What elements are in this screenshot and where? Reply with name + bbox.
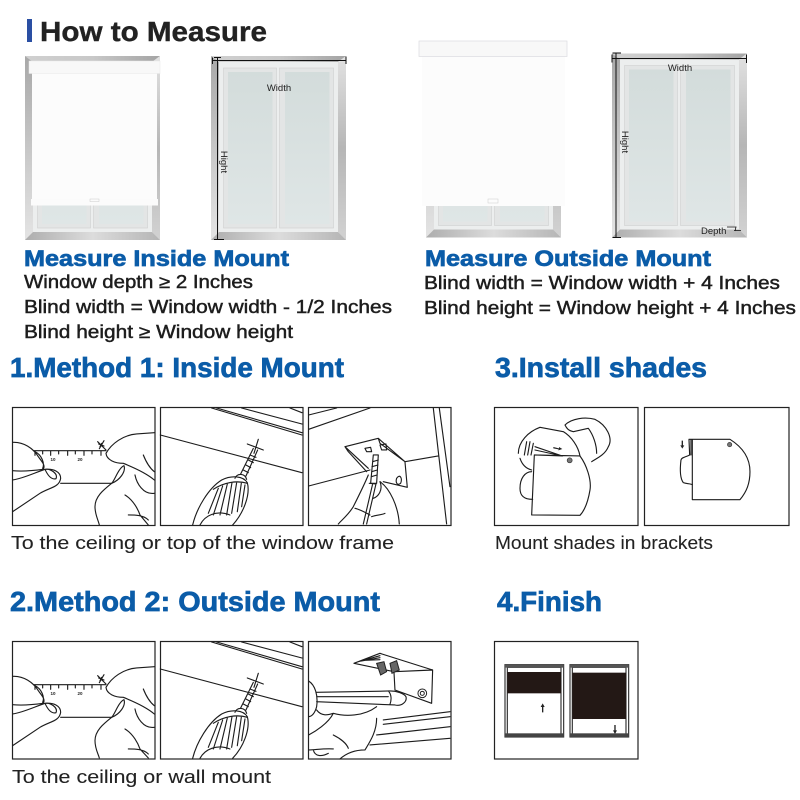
height label: Hight bbox=[218, 151, 229, 173]
panel: measure with ruler, method 2: 10 bbox=[50, 691, 56, 696]
panel: measure with ruler, method 1 bbox=[12, 408, 155, 526]
depth label: Depth bbox=[701, 226, 726, 237]
panel: measure with ruler, method 1: 10 bbox=[50, 457, 56, 462]
heading: measure outside mount: Measure Outside Mount bbox=[425, 246, 712, 271]
title accent bar bbox=[27, 19, 32, 42]
illustration: inside mount window with width and height marks bbox=[211, 56, 346, 240]
heading: install shades: 3.Install shades bbox=[495, 352, 707, 383]
panel: screw bracket to wall, method 2 bbox=[308, 642, 451, 759]
height measure line bbox=[612, 53, 621, 238]
caption: install shades: Mount shades in brackets bbox=[495, 533, 713, 553]
heading: finish: 4.Finish bbox=[497, 586, 602, 617]
heading: measure inside mount: Measure Inside Mount bbox=[24, 246, 290, 271]
width label: Width bbox=[267, 83, 291, 94]
inside mount rules: Window depth ≥ 2 Inches bbox=[24, 272, 253, 292]
inside mount rules bbox=[24, 272, 392, 342]
outside mount rules: Blind height = Window height + 4 Inches bbox=[424, 298, 796, 318]
depth mark bbox=[727, 227, 741, 231]
panel: measure with ruler, method 2 bbox=[12, 642, 155, 759]
panel: measure with ruler, method 2: 20 bbox=[77, 691, 83, 696]
width measure line bbox=[212, 56, 346, 64]
illustration: inside mount blind on window bbox=[25, 56, 160, 240]
width label: Width bbox=[668, 63, 692, 74]
illustration: outside mount window with width, height, depth marks bbox=[612, 53, 747, 238]
caption: method 2: To the ceiling or wall mount bbox=[12, 767, 271, 787]
illustration: outside mount blind on window bbox=[419, 41, 567, 238]
caption: method 1: To the ceiling or top of the window frame bbox=[11, 533, 394, 553]
left window, shade raised bbox=[505, 665, 564, 737]
panel: drill hole, method 2 bbox=[160, 642, 303, 759]
panel: finish, blinds up and down bbox=[494, 642, 638, 759]
panel: shade seated in bracket bbox=[644, 408, 789, 526]
inside mount rules: Blind width = Window width - 1/2 Inches bbox=[24, 297, 392, 317]
panel: insert shade in bracket bbox=[494, 408, 638, 526]
panel: drill hole, method 1 bbox=[160, 408, 303, 526]
height label: Hight bbox=[619, 131, 630, 153]
inside mount rules: Blind height ≥ Window height bbox=[24, 322, 293, 342]
heading: method 2: 2.Method 2: Outside Mount bbox=[10, 586, 380, 617]
width measure line bbox=[612, 54, 746, 63]
outside mount rules bbox=[424, 273, 796, 318]
heading: method 1: 1.Method 1: Inside Mount bbox=[10, 352, 344, 383]
title: How to Measure bbox=[40, 16, 267, 47]
panel: measure with ruler, method 1: 20 bbox=[77, 457, 83, 462]
height measure line bbox=[214, 57, 224, 240]
outside mount rules: Blind width = Window width + 4 Inches bbox=[424, 273, 780, 293]
panel: screw bracket to ceiling, method 1 bbox=[308, 408, 451, 526]
right window, shade lowered bbox=[570, 665, 629, 737]
